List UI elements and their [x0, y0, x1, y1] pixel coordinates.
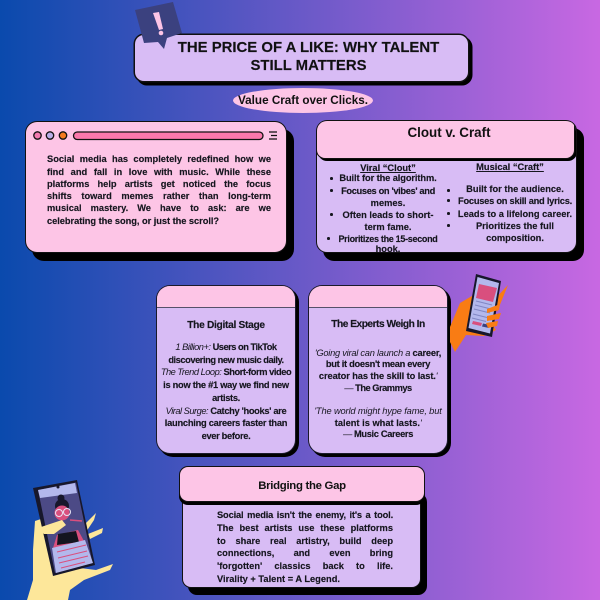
bridging paragraph: to share real artistry, build deep	[217, 536, 393, 546]
icon: yellow hand holding phone	[27, 480, 113, 600]
bridging paragraph: 'forgotten' classics back to life.	[217, 561, 393, 571]
digital stage statistics: ever before.	[202, 431, 250, 441]
icon: orange hand holding phone	[450, 274, 508, 352]
quote: The Grammys: — The Grammys	[344, 383, 412, 393]
intro paragraph: Social media has completely redefined how we	[47, 154, 271, 164]
panel: intro browser window	[26, 122, 286, 252]
column: musical craft: Built for the audience.	[466, 184, 564, 194]
tagline pill	[233, 88, 373, 113]
bridging paragraph: connections, and even bring	[217, 548, 393, 558]
icon: speech bubble with exclamation mark	[135, 2, 182, 49]
column: musical craft: Musical “Craft”	[476, 162, 544, 172]
digital stage statistics	[161, 342, 292, 441]
title banner	[135, 35, 468, 81]
column: musical craft: Focuses on skill and lyrics.	[458, 196, 572, 206]
column: musical craft: Prioritizes the full	[476, 221, 554, 231]
intro paragraph: musical mastery. We have to ask: are we	[47, 203, 271, 213]
card header band	[309, 286, 447, 308]
column: viral clout	[327, 163, 438, 252]
intro paragraph	[47, 154, 271, 226]
bridging paragraph: The best artists use these platforms	[217, 523, 393, 533]
column: viral clout: term fame.	[364, 222, 412, 232]
bridging paragraph: Virality + Talent = A Legend.	[217, 574, 340, 584]
column: viral clout: memes.	[371, 198, 405, 208]
column: viral clout: Prioritizes the 15-second	[338, 234, 438, 244]
column: musical craft: Leads to a lifelong career.	[458, 209, 572, 219]
digital stage statistics: discovering new music daily.	[168, 355, 284, 365]
bridging paragraph: Social media isn't the enemy, it's a tool.	[217, 510, 393, 520]
quote: Music Careers: talent is what lasts.'	[335, 418, 421, 428]
clout v craft header	[317, 121, 574, 158]
digital stage statistics: The Trend Loop: Short-form video	[161, 367, 291, 377]
quote: Music Careers: — Music Careers	[343, 429, 413, 439]
intro paragraph: find and fall in love with music. While these	[47, 166, 271, 176]
quote: The Grammys: but it doesn't mean every	[326, 359, 430, 369]
intro paragraph: celebrating the song, or just the scroll?	[47, 216, 219, 226]
quote: The Grammys	[315, 348, 441, 394]
digital stage statistics: Viral Surge: Catchy 'hooks' are	[166, 406, 286, 416]
card heading: The Digital Stage	[187, 320, 265, 331]
card heading: The Experts Weigh In	[331, 319, 425, 330]
tagline pill: Value Craft over Clicks.	[238, 94, 368, 107]
column: viral clout: Often leads to short-	[343, 210, 433, 220]
bridging paragraph	[217, 510, 393, 584]
column: viral clout: Focuses on 'vibes' and	[341, 186, 435, 196]
title line 1: THE PRICE OF A LIKE: WHY TALENT	[178, 40, 439, 56]
column: viral clout: Viral “Clout”	[360, 163, 416, 173]
column: musical craft: composition.	[486, 233, 544, 243]
quote: Music Careers	[314, 406, 442, 439]
quote: Music Careers: 'The world might hype fame, but	[314, 406, 442, 416]
bridging header	[180, 467, 424, 501]
digital stage statistics: is now the #1 way we find new	[163, 380, 289, 390]
card header band	[157, 286, 295, 308]
panel: clout versus craft	[317, 121, 576, 252]
bridging header: Bridging the Gap	[258, 480, 346, 492]
quote: The Grammys: creator has the skill to last.'	[319, 371, 437, 381]
clout v craft header: Clout v. Craft	[407, 125, 491, 140]
title line 2: STILL MATTERS	[250, 58, 367, 74]
intro paragraph: platforms help artists get noticed the focus	[47, 179, 271, 189]
digital stage statistics: launching careers faster than	[165, 418, 287, 428]
column: viral clout: Built for the algorithm.	[339, 173, 437, 183]
quote: The Grammys: 'Going viral can launch a career,	[315, 348, 441, 358]
column: musical craft	[447, 162, 572, 244]
digital stage statistics: 1 Billion+: Users on TikTok	[175, 342, 277, 352]
intro paragraph: shifts toward memes rather than long-term	[47, 191, 271, 201]
bridging body box	[183, 487, 420, 587]
browser controls	[33, 131, 277, 140]
panel: bridging the gap	[179, 466, 427, 595]
panel: the experts weigh in	[309, 286, 447, 453]
panel: the digital stage	[157, 286, 295, 453]
digital stage statistics: artists.	[212, 393, 240, 403]
